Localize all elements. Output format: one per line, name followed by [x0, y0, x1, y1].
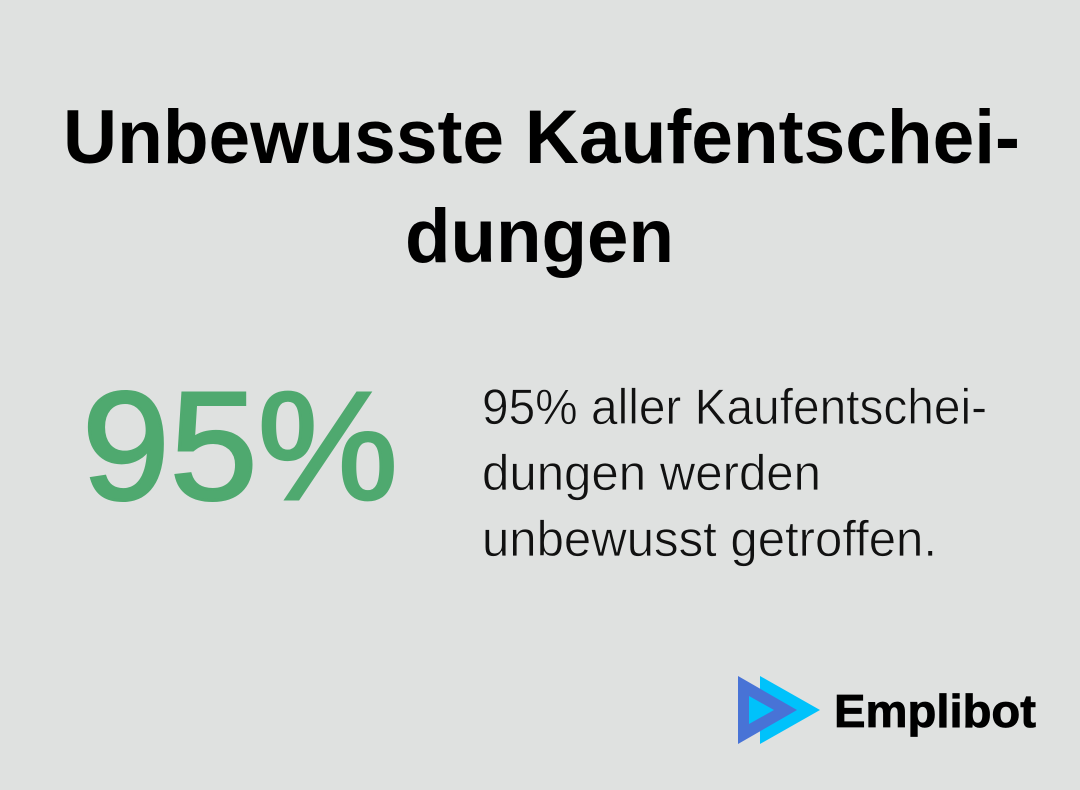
- stat description: dungen werden: [482, 445, 821, 501]
- stat description: unbewusst getroffen.: [482, 511, 937, 567]
- title: [63, 95, 1020, 279]
- logo: Emplibot: [738, 676, 1036, 744]
- title: Unbewusste Kaufentschei-: [63, 95, 1020, 180]
- big stat: 95%: 95%: [82, 360, 398, 532]
- title: dungen: [405, 194, 674, 279]
- stat description: [482, 379, 987, 567]
- logo wordmark: Emplibot: [834, 685, 1036, 737]
- stat description: 95% aller Kaufentschei-: [482, 379, 987, 435]
- icon: play triangles: [738, 676, 820, 744]
